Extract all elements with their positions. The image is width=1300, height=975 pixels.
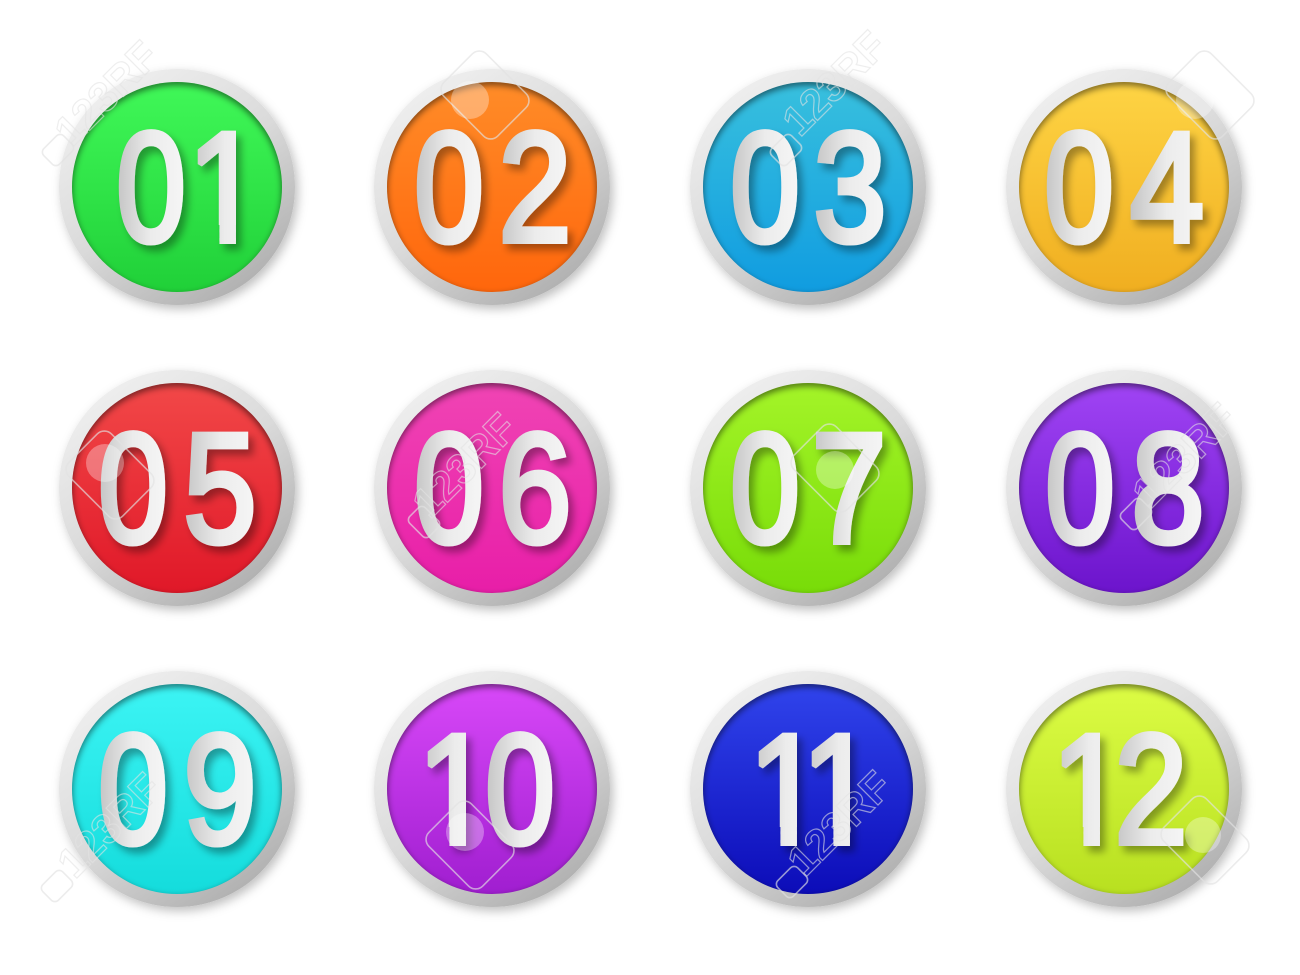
number 11: 1 — [801, 702, 877, 876]
number 04: 0 — [1044, 100, 1114, 274]
badge 10 — [374, 671, 610, 907]
number 03: 3 — [814, 100, 886, 275]
number 07: 7 — [812, 400, 886, 575]
number 07 — [730, 400, 886, 575]
number 02 — [414, 100, 571, 275]
badge 06 — [374, 370, 610, 606]
number 04: 4 — [1130, 100, 1204, 274]
number 10 — [428, 731, 562, 858]
number 12: 1 — [1051, 702, 1127, 876]
badge 03 — [690, 69, 926, 305]
badge 11 — [690, 671, 926, 907]
watermarks: 123RF — [1123, 394, 1246, 516]
number 04 — [1044, 100, 1204, 274]
number 01: 1 — [187, 100, 263, 274]
watermarks: 123RF — [403, 404, 526, 526]
number 03 — [730, 100, 886, 275]
number 06 — [414, 401, 571, 576]
number 05: 0 — [98, 401, 168, 575]
badge 12 — [1006, 671, 1242, 907]
number 11 — [758, 732, 860, 856]
number 03: 0 — [730, 100, 800, 274]
number 01: 0 — [116, 100, 186, 274]
badge 01 — [59, 69, 295, 305]
number 05: 5 — [184, 401, 256, 576]
number 02: 0 — [414, 100, 484, 274]
number 10: 1 — [417, 702, 493, 876]
number 09: 9 — [184, 702, 256, 877]
number 10: 0 — [485, 702, 555, 876]
number 07: 0 — [730, 401, 800, 575]
number 05 — [98, 401, 256, 576]
watermarks: 123RF — [773, 22, 896, 144]
watermarks: 123RF — [45, 32, 168, 154]
number 08: 0 — [1045, 401, 1115, 575]
badge 08 — [1006, 370, 1242, 606]
badge 09 — [59, 671, 295, 907]
number 12 — [1062, 731, 1192, 857]
badge 04 — [1006, 69, 1242, 305]
number 09: 0 — [98, 702, 168, 876]
number 06: 6 — [499, 401, 571, 576]
badge 07 — [690, 370, 926, 606]
number 11: 1 — [748, 702, 824, 876]
badge 02 — [374, 69, 610, 305]
number 08: 8 — [1132, 401, 1204, 576]
number 12: 2 — [1115, 702, 1187, 877]
number 02: 2 — [499, 100, 571, 275]
number 01 — [118, 129, 246, 256]
watermarks: 123RF — [48, 764, 171, 886]
number 09 — [98, 702, 256, 877]
watermarks: 123RF — [778, 762, 901, 884]
number 08 — [1045, 401, 1204, 576]
badge 05 — [59, 370, 295, 606]
number 06: 0 — [414, 401, 484, 575]
